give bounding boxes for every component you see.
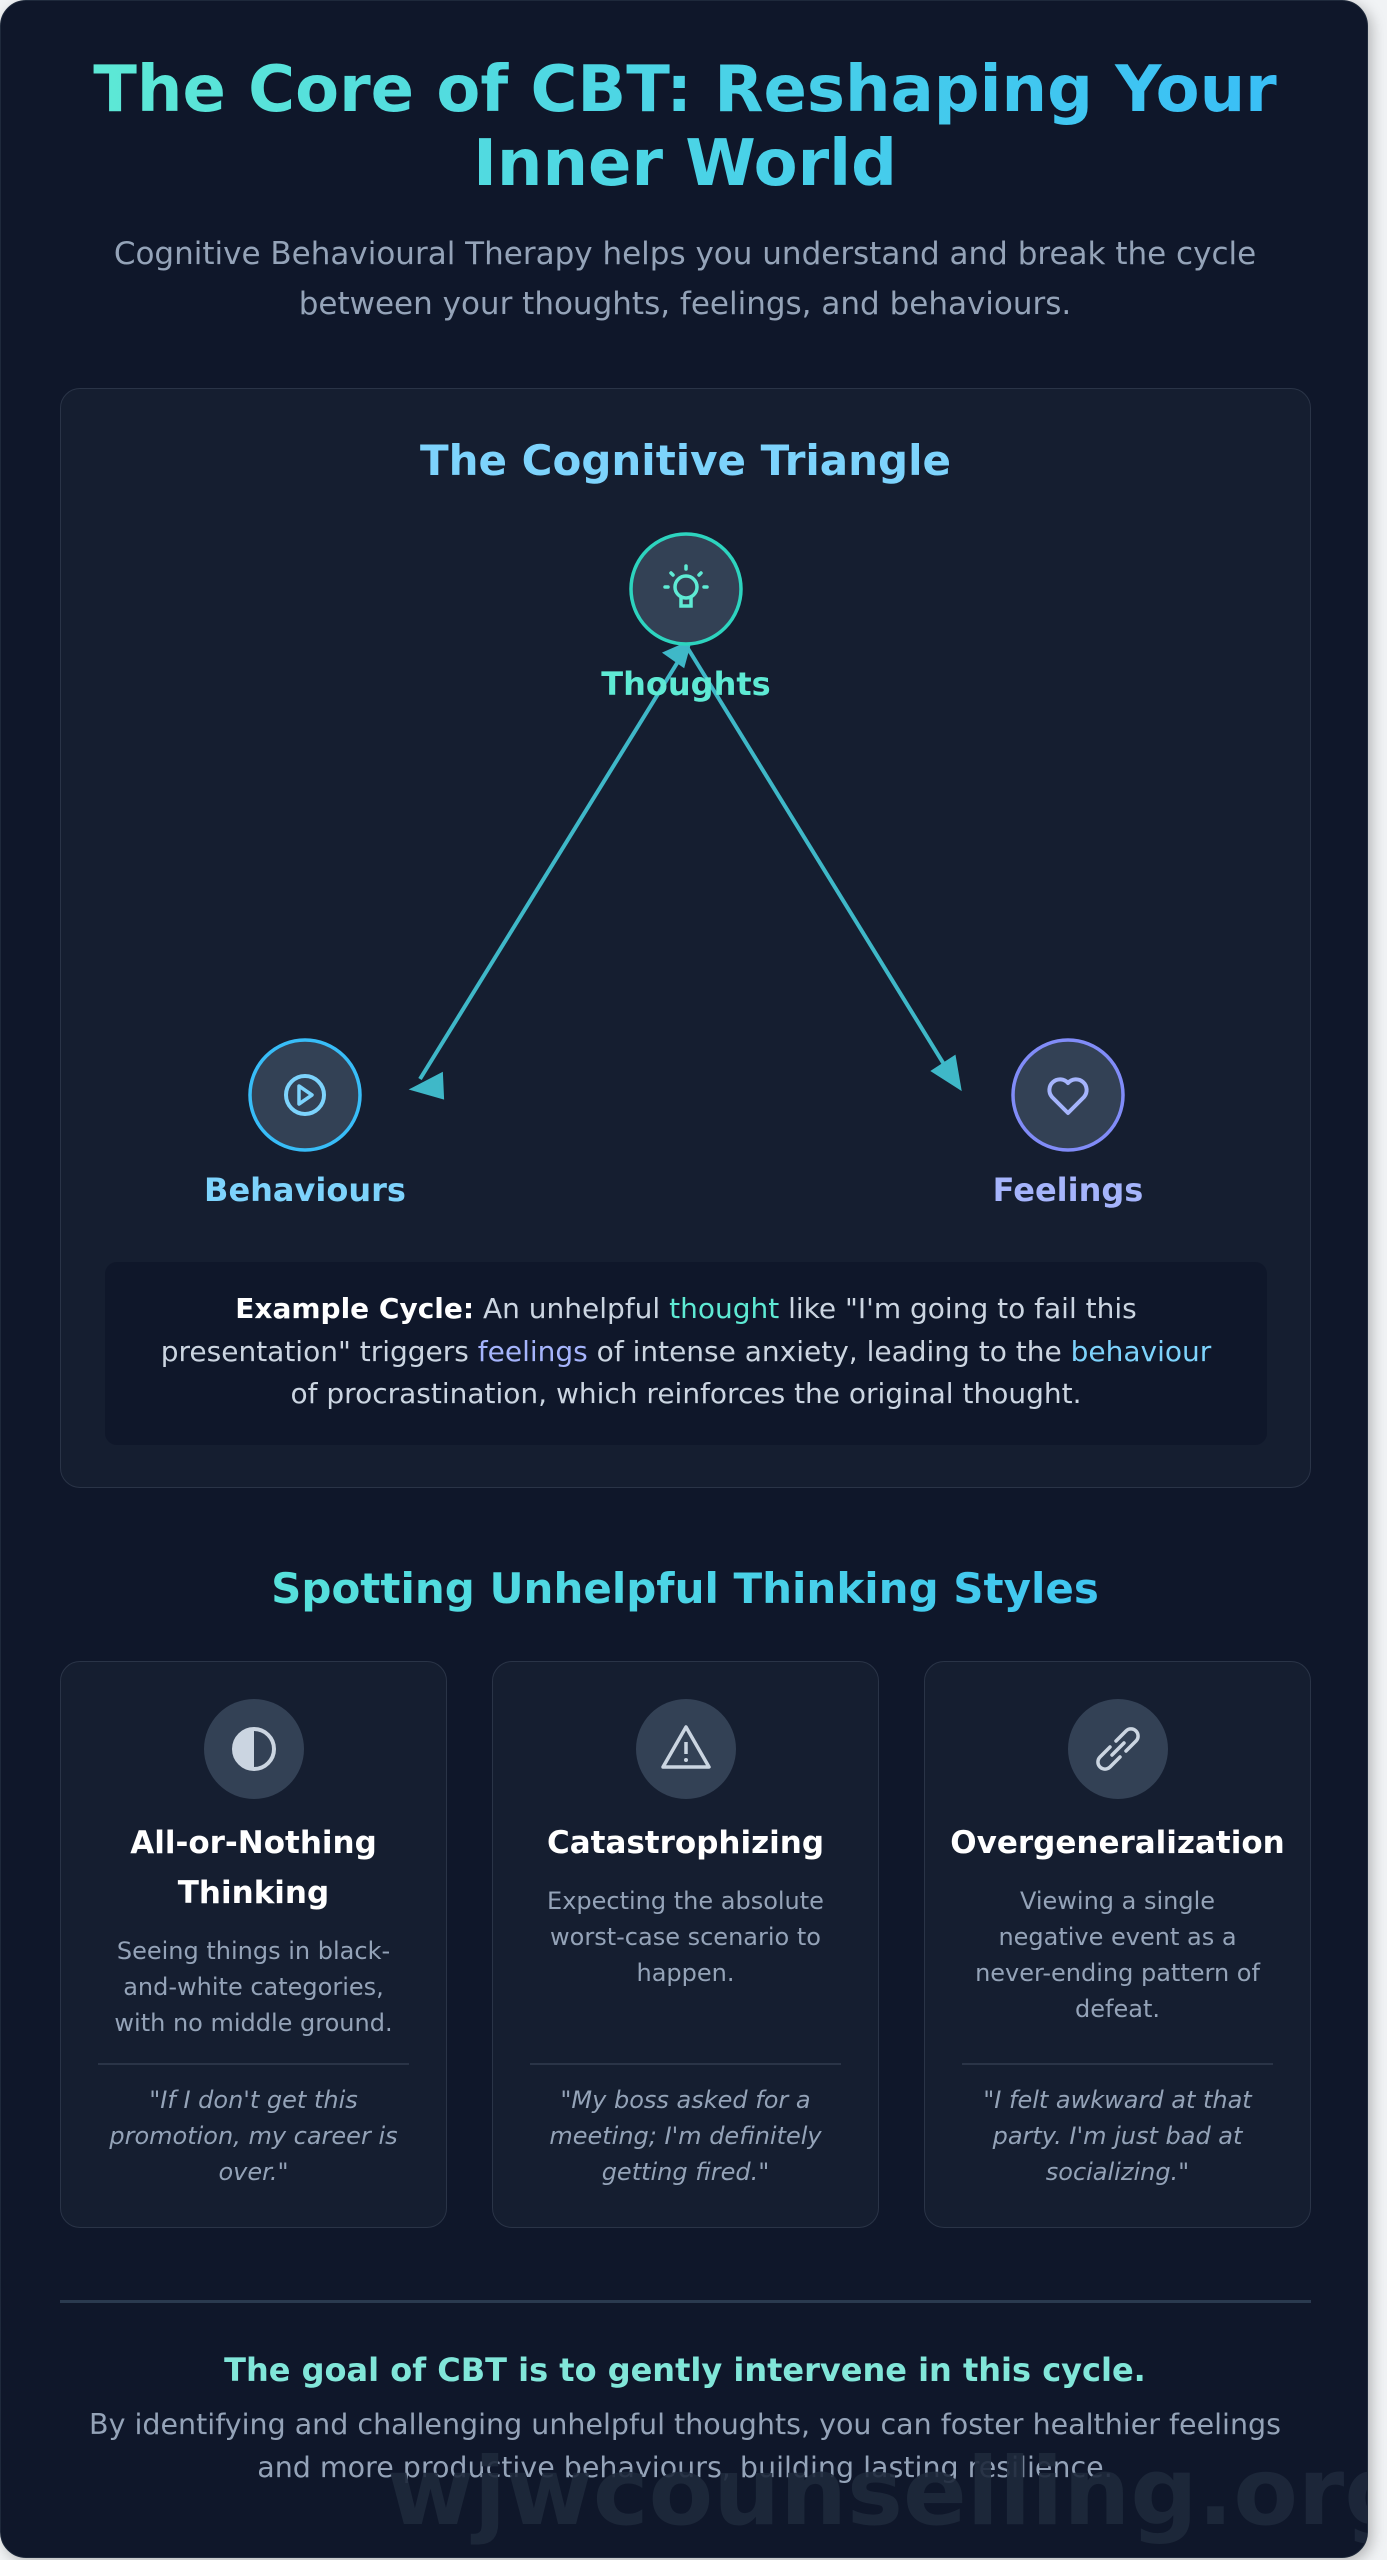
panel: cognitive triangle <box>60 388 1311 1488</box>
section heading: thinking styles: Spotting Unhelpful Thinking Styles <box>271 1564 1099 1613</box>
label: feelings: Feelings <box>993 1171 1143 1209</box>
card description: Viewing a single negative event as a never-ending pattern of defeat. <box>975 1887 1260 2023</box>
section heading: thinking styles <box>1 1563 1369 1615</box>
card quote: "If I don't get this promotion, my career is over." <box>109 2086 398 2186</box>
card title: Catastrophizing <box>547 1825 824 1861</box>
icon: half circle <box>204 1699 304 1799</box>
arrow: thoughts-feelings <box>687 647 959 1087</box>
card title: Overgeneralization <box>950 1825 1285 1861</box>
card quote: "My boss asked for a meeting; I'm definitely getting fired." <box>549 2086 822 2186</box>
subtitle: Cognitive Behavioural Therapy helps you understand and break the cycle between your thoughts, feelings, and behaviours. <box>114 236 1256 322</box>
label: behaviours: Behaviours <box>204 1171 406 1209</box>
title: The Core of CBT: Reshaping Your Inner World <box>93 53 1277 201</box>
card title: Thinking <box>178 1875 329 1911</box>
card description: Expecting the absolute worst-case scenario to happen. <box>547 1887 824 1987</box>
card title <box>130 1825 377 1911</box>
triangle diagram <box>204 532 1143 1209</box>
panel: all-or-nothing <box>60 1661 447 2228</box>
label: thoughts: Thoughts <box>601 665 771 703</box>
arrow: behaviours-thoughts <box>414 643 689 1097</box>
card description: Seeing things in black-and-white categories, with no middle ground. <box>114 1937 393 2037</box>
icon: feelings heart <box>1013 1040 1123 1150</box>
panel heading: The Cognitive Triangle <box>420 436 951 485</box>
example cycle box: Example Cycle: An unhelpful thought like "I'm going to fail this presentation" triggers feelings of intense anxiety, leading to the behaviour of procrastination, which reinforces the original thought. <box>161 1292 1211 1410</box>
icon: chain link <box>1068 1699 1168 1799</box>
icon: behaviours play <box>250 1040 360 1150</box>
icon: warning <box>636 1699 736 1799</box>
card quote: "I felt awkward at that party. I'm just bad at socializing." <box>983 2086 1252 2186</box>
panel: overgeneralization <box>924 1661 1311 2228</box>
conclusion heading: The goal of CBT is to gently intervene in this cycle. <box>224 2351 1146 2389</box>
example cycle box <box>105 1262 1267 1445</box>
panel: catastrophizing <box>492 1661 879 2228</box>
icon: thoughts lightbulb <box>631 534 741 644</box>
conclusion body: By identifying and challenging unhelpful thoughts, you can foster healthier feelings and more productive behaviours, building lasting resilience. <box>89 2408 1281 2484</box>
card title: All-or-Nothing <box>130 1825 377 1861</box>
